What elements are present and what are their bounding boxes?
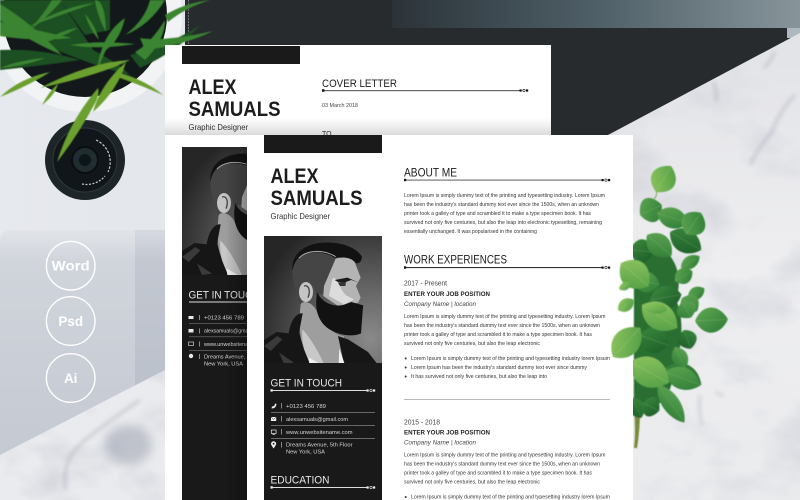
about me paragraph (404, 193, 606, 235)
basil plant: back layer (623, 160, 729, 448)
cover letter recipient: TO (322, 131, 332, 138)
sidebar (264, 236, 382, 500)
back page job title: Graphic Designer (188, 122, 248, 132)
work experiences rule (404, 266, 610, 269)
contact row: address: New York, USA (286, 450, 325, 456)
back page name: ALEX (188, 76, 236, 99)
job entry 1: It has survived not only five centuries, but also the leap into (411, 374, 547, 380)
job entry 1: Lorem Ipsum is simply dummy text of the printing and typesetting industry. Lorem Ipsum (404, 314, 606, 320)
education heading: EDUCATION (270, 475, 330, 487)
job entry 2: has been the industry's standard dummy text ever since the 1500s, when an unknown (404, 462, 600, 468)
header tab (264, 135, 382, 153)
back page contact rows: New York, USA (204, 362, 243, 368)
about me paragraph: has been the industry's standard dummy text ever since the 1500s, when an unknown (404, 202, 599, 208)
background: slate panel and marble lower left (0, 230, 165, 500)
about me heading: ABOUT ME (404, 168, 457, 180)
about me paragraph: survived not only five centuries, but also the leap into electronic typesetting, remaining (404, 220, 602, 226)
job entry 2 (404, 417, 611, 500)
badge: Word: Word (52, 258, 90, 274)
plant pot (0, 0, 182, 112)
contact row: address: Dreams Avenue, 5th Floor (286, 443, 353, 449)
job entry 1: Lorem Ipsum has been the industry's standard dummy text ever since dummy (411, 365, 587, 371)
background: dark notebook top right (185, 0, 800, 140)
resume page: cover letter (back) (165, 45, 551, 500)
back page surname: SAMUALS (188, 98, 280, 121)
back page contact rows: alexsamuals@gmail.com (204, 329, 262, 335)
work experiences heading: WORK EXPERIENCES (404, 254, 507, 266)
job entry 1: Lorem Ipsum is simply dummy text of the printing and typesetting industry lorem Ipsum (411, 356, 611, 362)
job entry 2: printer took a galley of type and scrambled it to make a type specimen book. It has (404, 471, 592, 477)
about me paragraph: printer took a galley of type and scrambled it to make a type specimen book. It has (404, 211, 591, 217)
surname: SAMUALS (270, 187, 362, 210)
cover letter date: 03 March 2018 (322, 103, 358, 109)
job entry 1: 2017 - Present (404, 279, 447, 288)
back page contact rows: +0123 456 789 (204, 316, 244, 322)
back page shadow (165, 118, 551, 135)
resume page: front (247, 135, 633, 500)
job entry 2: Lorem Ipsum is simply dummy text of the printing and typesetting industry. Lorem Ipsum (404, 453, 606, 459)
format badges: Word, Psd, Ai (46, 241, 95, 402)
job entry 2: 2015 - 2018 (404, 417, 440, 426)
back page sidebar (182, 147, 247, 500)
contact rule (270, 389, 375, 392)
contact row: phone: +0123 456 789 (286, 404, 326, 410)
contact row: email (271, 416, 348, 423)
job entry 1: Company Name | location (404, 301, 476, 308)
back page contact rows: Dreams Avenue, 5th Floor (204, 355, 269, 361)
job entry 1: ENTER YOUR JOB POSITION (404, 291, 490, 298)
background: marble top right (608, 33, 800, 500)
contact row: email: alexsamuals@gmail.com (286, 417, 348, 423)
back page header tab (182, 46, 300, 64)
back page portrait (182, 147, 247, 275)
about me rule (404, 179, 610, 181)
badge: Ai (46, 354, 95, 402)
contact row: website (271, 429, 353, 436)
job entry 2: ENTER YOUR JOB POSITION (404, 430, 490, 436)
basil plant: leaves over the page (603, 252, 658, 366)
back page contact rows (188, 315, 269, 368)
back page sidebar shadow (225, 147, 247, 500)
badge: Psd: Psd (58, 314, 83, 329)
back page contact heading: GET IN TOUCH (188, 290, 260, 302)
back page contact rule (189, 302, 247, 303)
job entry 2: survived not only five centuries, but also the leap electronic (404, 480, 540, 486)
cover letter rule (322, 89, 528, 92)
cover letter heading: COVER LETTER (322, 78, 397, 90)
badge: Word (46, 241, 95, 290)
education rule (270, 486, 375, 489)
back page contact rows: www.unwebsitename.com (203, 342, 268, 348)
name: ALEX (270, 165, 318, 188)
plant: grass blades (0, 0, 213, 162)
badge: Ai: Ai (64, 371, 77, 386)
job entry 2: Company Name | location (404, 440, 476, 446)
about me paragraph: essentially unchanged. It was popularised in the containing (404, 229, 537, 235)
job entry 1 (404, 279, 611, 380)
contact heading: GET IN TOUCH (270, 378, 342, 390)
about me paragraph: Lorem Ipsum is simply dummy text of the printing and typesetting industry. Lorem Ipsum (404, 193, 606, 199)
contact row: website: www.unwebsitename.com (285, 430, 353, 436)
job entry 1: survived not only five centuries, but also the leap electronic (404, 341, 540, 347)
camera lens (45, 120, 125, 200)
contact row: phone (272, 403, 326, 410)
contact row: address (271, 441, 353, 456)
job title: Graphic Designer (270, 211, 330, 221)
job entry 1: has been the industry's standard dummy text ever since the 1500s, when an unknown (404, 323, 600, 329)
badge: Psd (46, 297, 95, 345)
portrait photo (264, 236, 382, 364)
job entry 1: printer took a galley of type and scrambled it to make a type specimen book. It has (404, 332, 592, 338)
